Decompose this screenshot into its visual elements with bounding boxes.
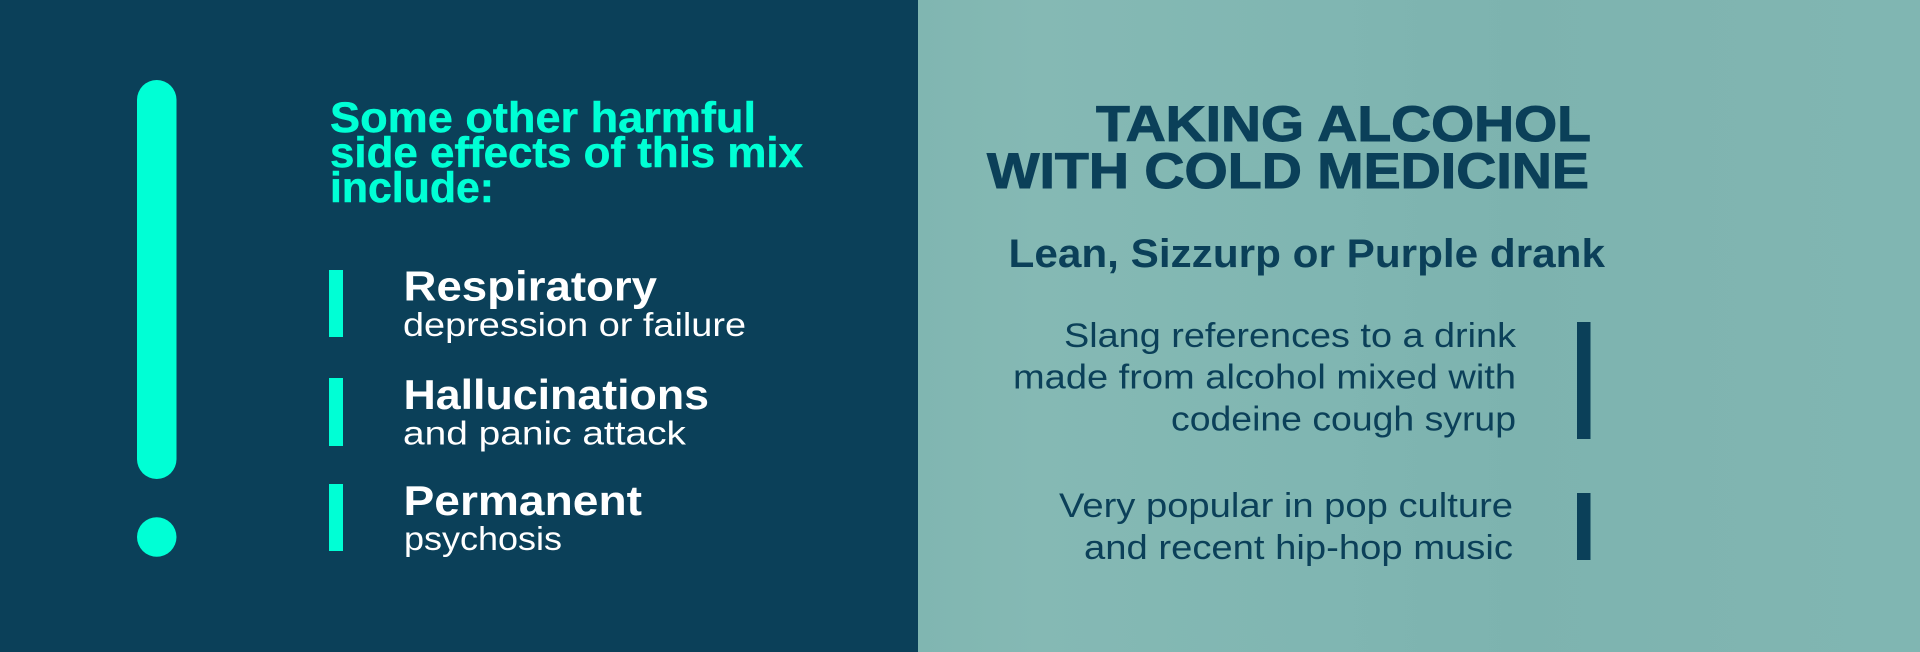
panel: right teal background	[918, 0, 1920, 652]
text block: pop culture	[1059, 487, 1513, 567]
icon: exclamation mark	[137, 80, 176, 557]
heading: harmful side effects: side effects of this mix	[330, 129, 803, 177]
accent bar: slang references	[1577, 322, 1590, 439]
side effect: permanent: Permanent	[404, 477, 642, 524]
accent bar: pop culture	[1577, 493, 1590, 560]
text block: slang references: codeine cough syrup	[1171, 400, 1516, 438]
side effect: respiratory	[329, 262, 746, 343]
side effect: hallucinations: and panic attack	[403, 414, 687, 452]
text block: slang references: made from alcohol mixed with	[1013, 358, 1516, 396]
heading: harmful side effects	[330, 94, 803, 212]
text block: slang references: Slang references to a drink	[1064, 317, 1517, 355]
side effect: respiratory: Respiratory	[404, 262, 658, 310]
subheading: slang names: Lean, Sizzurp or Purple drank	[1008, 232, 1606, 276]
side effect: hallucinations	[329, 371, 709, 452]
title: taking alcohol with cold medicine: WITH COLD MEDICINE	[987, 143, 1589, 199]
side effect: permanent: psychosis	[404, 520, 562, 557]
panel: left dark background	[0, 0, 918, 652]
title: taking alcohol with cold medicine	[987, 96, 1591, 199]
text block: pop culture: and recent hip-hop music	[1084, 529, 1513, 567]
heading: harmful side effects: include:	[330, 164, 494, 212]
text block: pop culture: Very popular in pop culture	[1059, 487, 1513, 525]
side effect: permanent	[329, 477, 642, 557]
heading: harmful side effects: Some other harmful	[330, 94, 756, 142]
title: taking alcohol with cold medicine: TAKING ALCOHOL	[1096, 96, 1591, 152]
text block: slang references	[1013, 317, 1517, 438]
side effect: respiratory: depression or failure	[403, 306, 746, 343]
side effect: hallucinations: Hallucinations	[404, 371, 709, 418]
